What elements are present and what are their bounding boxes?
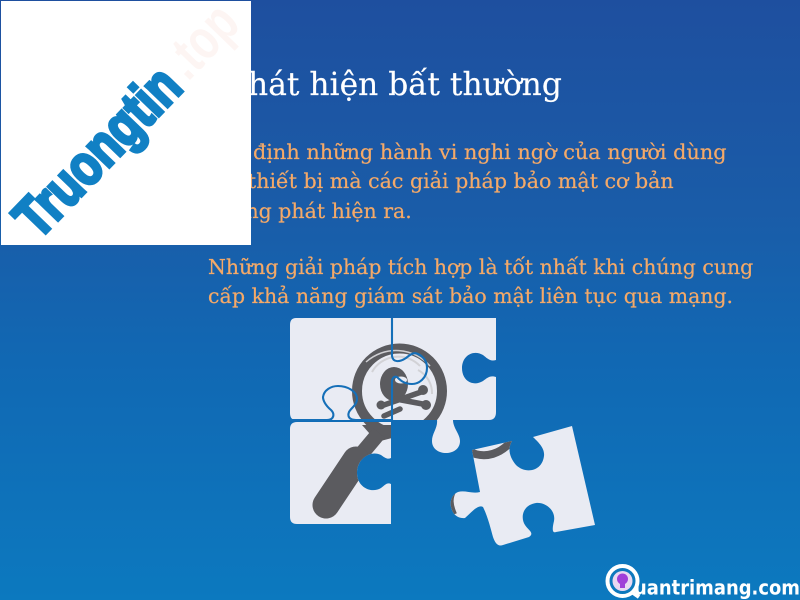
icon: magnifier and skull xyxy=(326,348,442,505)
text block: second paragraph: Những giải pháp tích hợp là tốt nhất khi chúng cung xyxy=(208,255,753,279)
logo icon: magnifier ring with light bulb xyxy=(608,566,639,597)
logo text: Truongtin: Truongtin xyxy=(1,54,194,245)
text block: first paragraph: Xác định những hành vi nghi ngờ của người dùng xyxy=(208,140,727,164)
text block: second paragraph: cấp khả năng giám sát bảo mật liên tục qua mạng. xyxy=(208,284,733,308)
logo: Quantrimang.com xyxy=(606,564,800,600)
text block: first paragraph xyxy=(208,140,727,223)
logo: Truongtin watermark box xyxy=(1,0,251,245)
text block: first paragraph: không phát hiện ra. xyxy=(208,199,412,223)
text block: first paragraph: và thiết bị mà các giải pháp bảo mật cơ bản xyxy=(218,169,674,193)
loose rotated puzzle piece xyxy=(451,426,595,546)
illustration: puzzle with magnifier and skull xyxy=(290,318,595,546)
puzzle pieces in place xyxy=(290,318,496,524)
title: Phát hiện bất thường xyxy=(227,67,562,103)
text block: second paragraph xyxy=(208,255,753,308)
puzzle seams xyxy=(290,318,427,420)
